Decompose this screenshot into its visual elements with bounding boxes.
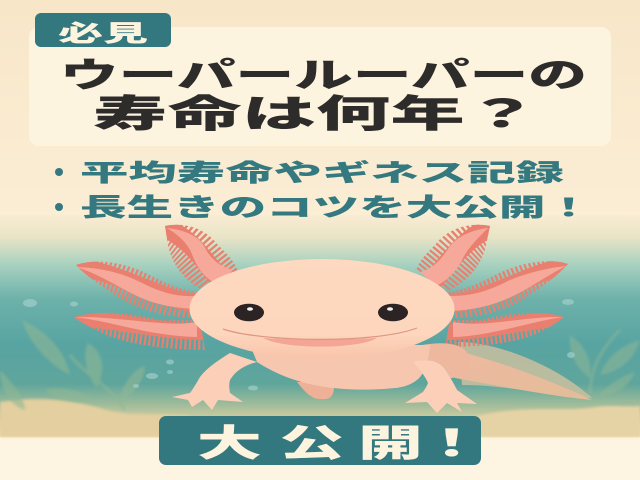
mouth	[223, 328, 417, 347]
button: 大公開！	[197, 423, 484, 464]
tail	[455, 342, 592, 400]
tag: 必見	[58, 20, 148, 46]
title: 寿命は何年？	[93, 94, 539, 136]
head	[190, 259, 454, 359]
seaweed right	[570, 330, 640, 396]
tag	[35, 13, 171, 47]
seaweed left	[0, 320, 145, 410]
bubbles	[23, 299, 575, 390]
gills left	[68, 225, 233, 337]
bullet list: 長生きのコツを大公開！	[80, 194, 592, 222]
title: ウーパールーパーの	[60, 57, 587, 95]
hind leg and body	[250, 343, 470, 399]
gills right	[420, 225, 574, 337]
bullet list	[55, 160, 592, 222]
title	[60, 57, 587, 136]
axolotl	[68, 225, 592, 413]
front legs	[172, 353, 477, 413]
info panel	[29, 27, 611, 146]
eyes	[234, 304, 408, 321]
sand seabed	[0, 399, 640, 437]
bullet list: 平均寿命やギネス記録	[80, 160, 564, 187]
